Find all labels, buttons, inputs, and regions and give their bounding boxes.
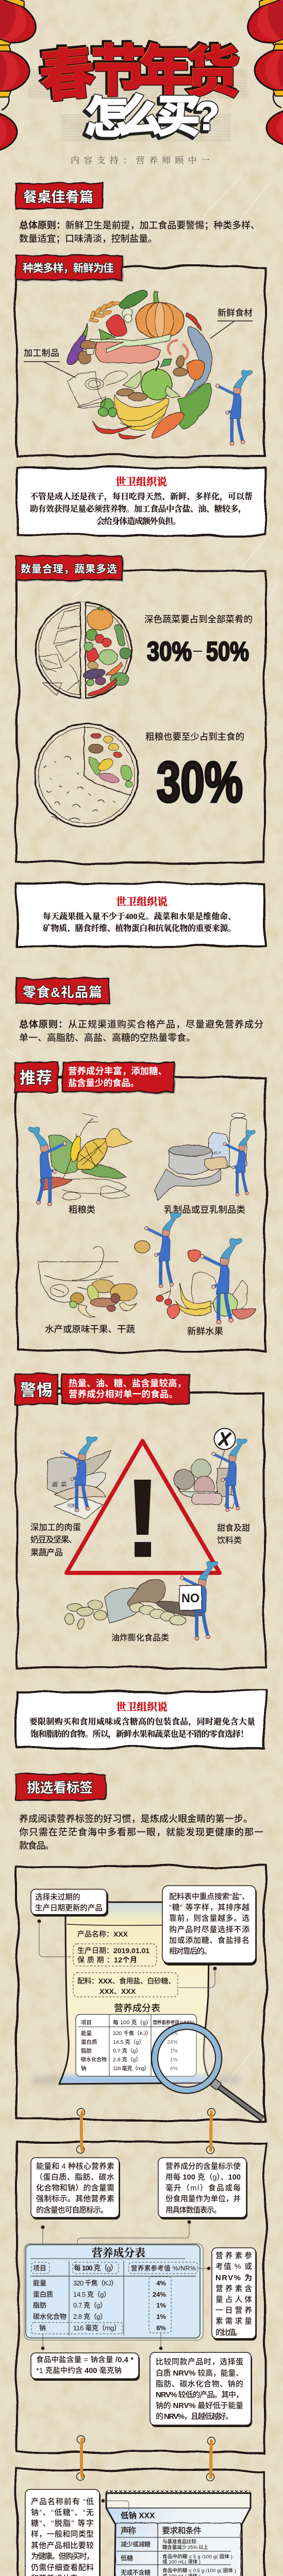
callout: units: 用具体数值表示。 — [165, 2206, 221, 2214]
callout: low-sodium claims: 其他产品相比要较 — [31, 2541, 94, 2550]
title: 春节年货怎么买: 货 — [185, 42, 240, 104]
product information: 产品名称：XXX — [77, 1930, 128, 1938]
snack principle paragraph: 总体原则：从正规渠道购买合格产品，尽量避免营养成分 — [19, 1019, 263, 1029]
claims table conditions: 或 100 mL( 液体 ) — [162, 2558, 201, 2565]
nutrition table large: 1% — [156, 2301, 166, 2309]
callout: ingredient list: 加或添加糖、食盐排名 — [169, 1936, 249, 1945]
icon: cucumber — [117, 287, 150, 312]
shadow under package — [34, 2076, 240, 2083]
label: seafood and nuts: 水产或原味干果、干蔬 — [45, 1324, 135, 1334]
icon: bananas — [114, 394, 169, 430]
claims table header: 声称 — [121, 2527, 136, 2536]
panel: recommended — [15, 1062, 265, 1351]
nutrition table heading small: 营养成分表 — [114, 2003, 160, 2013]
icon: mushroom slices — [173, 356, 187, 376]
callout: low-sodium claims: 为健康。但购买时， — [31, 2551, 94, 2561]
panel frame — [17, 2470, 265, 2576]
illustration: fried foods — [65, 1580, 204, 1630]
nutrition table large: 116 毫克（mg） — [73, 2324, 121, 2332]
claims table — [115, 2523, 241, 2576]
callout: core nutrients: 能量和 4 种核心营养素 — [36, 2162, 114, 2171]
rope links between panels — [76, 2108, 215, 2481]
icon: meat — [95, 340, 161, 363]
section banner: 挑选看标签 — [16, 1774, 106, 1800]
panel: variety and freshness — [16, 256, 265, 456]
title: 春节年货怎么买: 么 — [118, 91, 162, 141]
label: processed: 奶豆及坚果、 — [30, 1535, 77, 1545]
callout: sodium conversion — [31, 2353, 140, 2381]
icon: green onion — [90, 329, 171, 352]
callout: NRV — [212, 2248, 257, 2341]
callout: NRV: 营养素含 — [215, 2284, 252, 2293]
title: 春节年货怎么买: 节 — [89, 38, 144, 100]
claims table conditions: 糖含量减少 25% 以上 — [162, 2544, 208, 2550]
nutrition table large: 钠 — [39, 2324, 46, 2332]
claims table conditions: 与基准食品比较 — [162, 2539, 196, 2545]
title: 春节年货怎么买: 么 — [116, 93, 160, 143]
section banner: 餐桌佳肴篇: 餐桌佳肴篇 — [23, 190, 93, 205]
icon: red bell pepper — [106, 315, 127, 336]
panel frame — [17, 2142, 265, 2452]
callout: NRV: 素需求量 — [215, 2317, 252, 2326]
nutrition table small: 4% — [170, 2030, 178, 2037]
chef left — [60, 1437, 97, 1512]
section banner: 零食&礼品篇 — [16, 978, 109, 1004]
label: processed foods: 加工制品 — [24, 348, 59, 358]
nutrition table small: 24% — [167, 2039, 178, 2045]
banner: recommend description: 盐含量少的食品。 — [68, 1078, 139, 1088]
nutrition table large: 2.8 克（g） — [73, 2313, 107, 2320]
product information — [73, 1930, 178, 1997]
icon: peanuts — [116, 389, 147, 401]
WHO note 1: 会给身体造成额外负担。 — [96, 516, 181, 526]
callout: ingredient list: “糖” 等字样，其排序越 — [169, 1903, 249, 1912]
icon: eggplant — [67, 323, 88, 365]
callout: comparing products: 的 NRV%，且越低越好。 — [156, 2412, 233, 2421]
claims table header — [121, 2527, 202, 2536]
banner: caution keyword: 警惕 — [20, 1381, 53, 1399]
callout: low-sodium claims: 糖”、“脱脂” 等字 — [31, 2518, 94, 2528]
nutrition table large: 蛋白质 — [33, 2291, 53, 2298]
nutrition table small: 14.5 克（g） — [113, 2039, 144, 2045]
icon: green apple — [141, 359, 172, 400]
principle paragraph: 数量适宜；口味清淡，控制盐量。 — [19, 234, 157, 244]
nutrition table large: 24% — [153, 2291, 166, 2298]
banner: caution description — [58, 1374, 190, 1404]
product information: XXX、XXX — [99, 1987, 136, 1995]
icon: wheat — [89, 300, 122, 323]
icon: NO sign — [179, 1585, 202, 1610]
colored vegetables half — [82, 605, 131, 696]
number: 30%: 30% — [157, 751, 243, 814]
callout: comparing products: 钠的 NRV% 最好低于能量 — [156, 2401, 243, 2410]
title: 春节年货怎么买: 怎 — [85, 93, 129, 143]
title: 春节年货怎么买: ? — [195, 93, 220, 139]
WHO note 2: 矿物质、膳食纤维、植物蛋白和抗氧化物的重要来源。 — [43, 923, 236, 933]
panel: food label — [17, 1867, 265, 2120]
claims table conditions: 食品中的糖 ≤ 5 g /100 g( 固体 ) — [162, 2553, 232, 2560]
icon: shrimp — [168, 340, 188, 360]
label: processed: 深加工的肉蛋 — [30, 1523, 81, 1532]
number: 30%-50%: 50% — [206, 637, 249, 667]
label reading paragraph: 养成阅读营养标签的好习惯，是炼成火眼金睛的第一步。 — [19, 1814, 253, 1824]
nutrition table large: 1% — [156, 2313, 166, 2320]
label reading paragraph — [19, 1814, 263, 1851]
nutrition table small: 0.7 克（g） — [113, 2047, 141, 2054]
icon: melon slices — [123, 371, 180, 398]
callout: NRV: 的比值。 — [215, 2328, 242, 2337]
WHO note 1: 助有效获得足量必须营养物。加工食品中含盐、油、糖较多， — [30, 504, 246, 514]
icon: sliced vegetable — [122, 308, 132, 323]
nutrition table large: 4% — [156, 2279, 166, 2287]
callout: sodium conversion: *1 克盐中约含 400 毫克钠 — [36, 2366, 122, 2375]
callout: ingredient list: 相对靠后的。 — [169, 1947, 211, 1956]
label: grains: 粗粮类 — [69, 1205, 95, 1215]
icon: NO sign: NO — [181, 1591, 199, 1605]
icon: mushrooms — [76, 341, 96, 367]
label: processed foods — [24, 348, 76, 378]
icon: processed food sketches — [67, 371, 128, 408]
product information: 配料：XXX、食用盐、白砂糖、 — [77, 1977, 175, 1985]
banner: recommend description — [58, 1062, 175, 1093]
nutrition table large: 每 100 克（g） — [74, 2264, 118, 2272]
title: 春节年货怎么买: ? — [195, 93, 220, 139]
banner: variety: 种类多样，新鲜为佳 — [23, 262, 114, 274]
label: fried foods: 油炸膨化食品类 — [111, 1633, 169, 1642]
product name on packet: 低钠 XXX — [121, 2511, 155, 2520]
banner: recommend keyword: 推荐 — [20, 1069, 52, 1087]
icon: carrot — [152, 412, 184, 438]
title: 春节年货怎么买: 节 — [91, 40, 146, 103]
title: 春节年货怎么买: 春 — [37, 41, 98, 109]
label: sweets: 饮料类 — [217, 1536, 242, 1545]
number: 30%-50%: 30% — [147, 637, 192, 667]
icon: orange pepper — [187, 360, 205, 380]
warning triangle — [66, 1441, 220, 1573]
panel: product claims — [17, 2470, 265, 2576]
chef with grains — [28, 1127, 67, 1206]
callout: low-sodium claims: 仍需仔细查看配料 — [31, 2564, 94, 2572]
icon: leafy greens — [178, 383, 211, 429]
callout: NRV: 考值 % 或 — [215, 2262, 252, 2271]
text: dark vegetables: 深色蔬菜要占到全部菜肴的 — [144, 614, 253, 624]
nutrition table small: 碳水化合物 — [81, 2056, 107, 2063]
connector to NRV callout — [197, 2267, 210, 2270]
callout: low-sodium claims: 产品名称前有 “低 — [31, 2498, 94, 2506]
callout: core nutrients: 化合物和钠）的含量需 — [36, 2183, 114, 2193]
callout: core nutrients: （蛋白质、脂肪、碳水 — [35, 2173, 114, 2181]
callout: core nutrients: 强制标示。其他营养素 — [36, 2194, 114, 2203]
section banner: 零食&礼品篇: 零食&礼品篇 — [23, 985, 102, 1000]
label reading paragraph: 款食品。 — [19, 1840, 54, 1851]
label: processed: 果蔬产品 — [30, 1548, 63, 1557]
callout: ingredient list: 靠前，则含量越多。选 — [169, 1913, 249, 1923]
title: 春节年货怎么买: 春 — [35, 39, 96, 107]
chef with fruits — [200, 1239, 242, 1324]
title: 春节年货怎么买: 么 — [118, 91, 162, 141]
nutrition table small: 1% — [170, 2048, 178, 2054]
nutrition table small: 320 千焦（KJ） — [113, 2030, 152, 2037]
seated chef — [144, 1213, 181, 1288]
callout: ingredient list: 购产品时尽量选择不添 — [169, 1925, 249, 1934]
title: 春节年货怎么买: 买 — [156, 92, 201, 142]
plate: whole grains — [35, 724, 138, 827]
panel frame — [17, 1077, 265, 1351]
label: fresh ingredients: 新鲜食材 — [218, 308, 253, 318]
WHO note 3 — [17, 1691, 265, 1748]
illustration: fresh fruits — [157, 1250, 256, 1319]
banner: caution description: 热量、油、糖、盐含量较高， — [69, 1378, 186, 1388]
nutrition table small: 1% — [170, 2057, 178, 2063]
lantern decorations right — [240, 0, 283, 151]
illustration: dairy — [155, 1113, 246, 1209]
callout: units: 份食用量作为单位，并 — [165, 2194, 241, 2203]
label: fresh ingredients — [210, 308, 253, 338]
icon: chili peppers — [93, 421, 145, 439]
nutrition table small: 每 100 克（g） — [113, 2019, 152, 2026]
claims table conditions: 食品中的糖 ≤ 0.5 g /100 g( 固体 ) — [162, 2568, 236, 2574]
illustration: processed foods: 酱菜 — [52, 1480, 67, 1488]
callout: ingredient list — [162, 1886, 257, 1965]
banner: caution description: 营养成分相对单一的食品。 — [69, 1389, 178, 1399]
title: 春节年货怎么买: 怎 — [82, 95, 127, 145]
title: 春节年货怎么买: 货 — [185, 42, 240, 104]
callout: comparing products: NRV% 较低的产品。其中， — [156, 2390, 243, 2399]
claims table terms — [119, 2540, 158, 2576]
WHO note 2: 每天蔬果摄入量不少于400克。蔬菜和水果是维他命、 — [43, 911, 236, 921]
WHO note 1: 世卫组织说 — [115, 476, 167, 488]
illustration: dairy: MILK — [212, 1151, 222, 1156]
icon: no sign — [214, 1428, 235, 1468]
illustration: food package — [59, 1902, 210, 2084]
section banner: 餐桌佳肴篇 — [16, 183, 103, 209]
banner: recommend keyword — [15, 1062, 58, 1093]
callout: units — [158, 2158, 247, 2219]
connector: ingredient list — [179, 1967, 217, 1988]
title: 春节年货怎么买: 年 — [136, 38, 192, 100]
WHO note 1 — [17, 468, 265, 535]
coarse grains — [89, 733, 134, 787]
title: 春节年货怎么买: 节 — [91, 40, 146, 103]
callout: units: 用每 100 克（g）、100 — [165, 2173, 241, 2181]
title: 春节年货怎么买: 年 — [138, 40, 194, 103]
callout: sodium conversion: 食品中盐含量 = 钠含量 /0.4 * — [36, 2355, 134, 2364]
WHO note 2: 世卫组织说 — [116, 896, 168, 908]
title: 春节年货怎么买: 春 — [36, 41, 98, 108]
illustration: processed foods — [47, 1450, 111, 1519]
WHO note 3: 饱和脂肪的食物。所以，新鲜水果和蔬菜也是不错的零食选择！ — [30, 1729, 248, 1739]
panel frame — [17, 1867, 265, 2120]
nutrition table small: 116 毫克（mg） — [113, 2065, 149, 2072]
product information: 生产日期：2019.01.01 — [77, 1946, 149, 1955]
panel frame — [17, 571, 265, 862]
label: fruits: 新鲜水果 — [187, 1326, 223, 1336]
nutrition table large: 碳水化合物 — [33, 2313, 66, 2320]
nutrition table small: 蛋白质 — [81, 2039, 97, 2045]
panel frame — [17, 267, 265, 456]
label: sweets: 甜食及甜 — [217, 1523, 250, 1533]
callout: production date — [31, 1889, 108, 1917]
callout: production date: 选择未过期的 — [35, 1893, 80, 1902]
connector: production date — [37, 1920, 71, 1957]
banner: quantity: 数量合理，蔬果多选 — [21, 563, 117, 575]
WHO note 3: 世卫组织说 — [116, 1701, 168, 1713]
title: 春节年货怎么买 — [28, 38, 247, 145]
nutrition table large: 0.7 克（g） — [73, 2301, 107, 2309]
nutrition table large: 项目 — [33, 2264, 46, 2272]
nutrition table large: 320 千焦（KJ） — [73, 2279, 118, 2287]
title: 春节年货怎么买: 节 — [90, 40, 146, 102]
illustration: processed foods: 肉脯 — [67, 1503, 75, 1508]
banner: caution keyword — [15, 1374, 58, 1404]
callout: production date: 生产日期更新的产品 — [35, 1904, 103, 1912]
claims table header: 要求和条件 — [162, 2527, 202, 2536]
section banner: 挑选看标签: 挑选看标签 — [27, 1780, 93, 1795]
title: 春节年货怎么买: 年 — [138, 40, 194, 103]
nutrition table small: 能量 — [81, 2030, 92, 2037]
title: 春节年货怎么买: 货 — [182, 40, 238, 102]
subtitle: 内容支持：营养师顾中一 — [71, 155, 210, 165]
principle paragraph: 总体原则：新鲜卫生是前提，加工食品要警惕；种类多样、 — [19, 221, 260, 231]
nutrition table small: 脂肪 — [81, 2047, 92, 2054]
panel: nutrition table explanation — [17, 2142, 265, 2452]
package inner line — [67, 1924, 207, 1925]
connector to sodium callout — [41, 2334, 44, 2350]
lantern decorations left — [0, 0, 43, 157]
title: 春节年货怎么买: 货 — [184, 41, 240, 104]
icon: pumpkin — [136, 291, 184, 338]
callout: units: 毫升（ml）食品或每 — [165, 2183, 241, 2193]
nutrition table large: 营养成分表 — [92, 2247, 145, 2259]
connector to packet — [102, 2499, 129, 2511]
nutrition table small — [76, 2014, 196, 2076]
callout: low-sodium claims: 样，一般和同类型 — [31, 2530, 94, 2539]
banner: quantity — [16, 556, 124, 582]
nutrition table large: 营养素参考值 %/NR% — [131, 2264, 196, 2272]
callout: low-sodium claims — [25, 2489, 101, 2576]
WHO note 1: 不管是成人还是孩子，每日吃得天然、新鲜、多样化，可以帮 — [30, 492, 253, 502]
callout: comparing products — [150, 2352, 252, 2427]
panel frame — [17, 1393, 265, 1668]
nutrition table large: 14.5 克（g） — [73, 2291, 110, 2298]
icon: walnut — [135, 1241, 150, 1253]
nutrition table large: 6% — [156, 2324, 166, 2332]
icon: red chili — [186, 313, 201, 331]
chef with dairy — [223, 1130, 255, 1196]
nutrition table small: 6% — [170, 2065, 178, 2072]
food circle illustration — [67, 287, 212, 439]
label: sweets — [217, 1523, 250, 1545]
nutrition table small: 项目 — [81, 2020, 92, 2026]
nutrition table large: 脂肪 — [33, 2301, 46, 2309]
chef figure — [215, 370, 252, 445]
connectors from callouts to table — [41, 2221, 191, 2260]
icon: fish — [186, 327, 212, 396]
callout: core nutrients: 的含量也可自愿标示。 — [36, 2205, 108, 2214]
principle paragraph — [19, 221, 260, 244]
nutrition table small: 钠 — [81, 2065, 87, 2072]
claims table terms: 低糖 — [121, 2554, 133, 2562]
illustration: snack packet — [106, 2490, 251, 2576]
title: 春节年货怎么买: 买 — [154, 94, 198, 144]
title: 春节年货怎么买: 怎 — [85, 93, 129, 143]
number: 30%-50% — [147, 637, 249, 667]
claims table conditions — [162, 2539, 238, 2576]
callout: NRV: NRV% 为 — [215, 2274, 252, 2282]
illustration: sweets and drinks — [174, 1459, 236, 1509]
chef with no sign — [180, 1562, 218, 1640]
title: 春节年货怎么买: 买 — [156, 92, 201, 142]
callout: ingredient list: 配料表中重点搜索“盐”、 — [169, 1892, 249, 1901]
icon: broccoli — [98, 399, 117, 417]
text: whole grains: 粗粮也要至少占到主食的 — [145, 732, 244, 742]
claims table terms: 减少或减糖 — [121, 2540, 151, 2548]
callout: units: 营养成分的含量标示使 — [165, 2162, 241, 2171]
panel: quantity — [16, 556, 265, 862]
callout: low-sodium claims: 钠”、“低糖”、“无 — [31, 2508, 94, 2517]
callout: core nutrients — [31, 2158, 120, 2219]
rice grain marks — [44, 756, 115, 821]
WHO note 3: 要限制购买和食用咸味或含糖高的包装食品，同时避免含大量 — [29, 1717, 255, 1727]
callout: NRV: 营养素参 — [215, 2251, 252, 2260]
snack principle paragraph: 单一、高脂肪、高盐、高糖的空热量零食。 — [19, 1032, 195, 1043]
nutrition table large — [24, 2244, 203, 2340]
illustration: grains — [40, 1113, 132, 1200]
label: processed — [30, 1523, 81, 1557]
callout: NRV: 量占人体 — [215, 2295, 252, 2304]
sketched meat half — [39, 608, 80, 696]
icon: magnifying glass — [152, 2023, 263, 2119]
callout: comparing products: 脂肪、碳水化合物、钠的 — [156, 2380, 243, 2388]
plate: half vegetables — [36, 602, 131, 699]
banner: variety — [16, 256, 124, 281]
callout: NRV: 一日营养 — [215, 2306, 252, 2315]
nutrition table large: 能量 — [33, 2279, 46, 2287]
nutrition table small: 2.8 克（g） — [113, 2056, 141, 2063]
chef right — [211, 1439, 247, 1512]
nutrition table small: 营养素参考值 %/NR% — [153, 2020, 195, 2026]
banner: recommend description: 营养成分丰富，添加糖、 — [68, 1066, 167, 1076]
callout: comparing products: 比较同款产品时，选择蛋 — [156, 2357, 243, 2366]
snack principle paragraph — [19, 1019, 263, 1043]
label: dairy: 乳制品或豆乳制品类 — [164, 1205, 245, 1215]
panel: caution — [15, 1374, 265, 1668]
connector to comparison callout — [159, 2333, 162, 2350]
title: 春节年货怎么买: ? — [193, 95, 218, 141]
title: 春节年货怎么买: 年 — [138, 40, 193, 102]
illustration: dried seafood and nuts — [37, 1247, 137, 1317]
callout: comparing products: 白质 NRV% 较高，能量、 — [156, 2368, 243, 2378]
product information: 保 质 期 ：12个月 — [77, 1956, 137, 1964]
label reading paragraph: 你只需在茫茫食海中多看那一眼，就能发现更健康的那一 — [19, 1827, 263, 1837]
title: 春节年货怎么买: 春 — [37, 41, 98, 109]
WHO note 2 — [17, 883, 265, 946]
